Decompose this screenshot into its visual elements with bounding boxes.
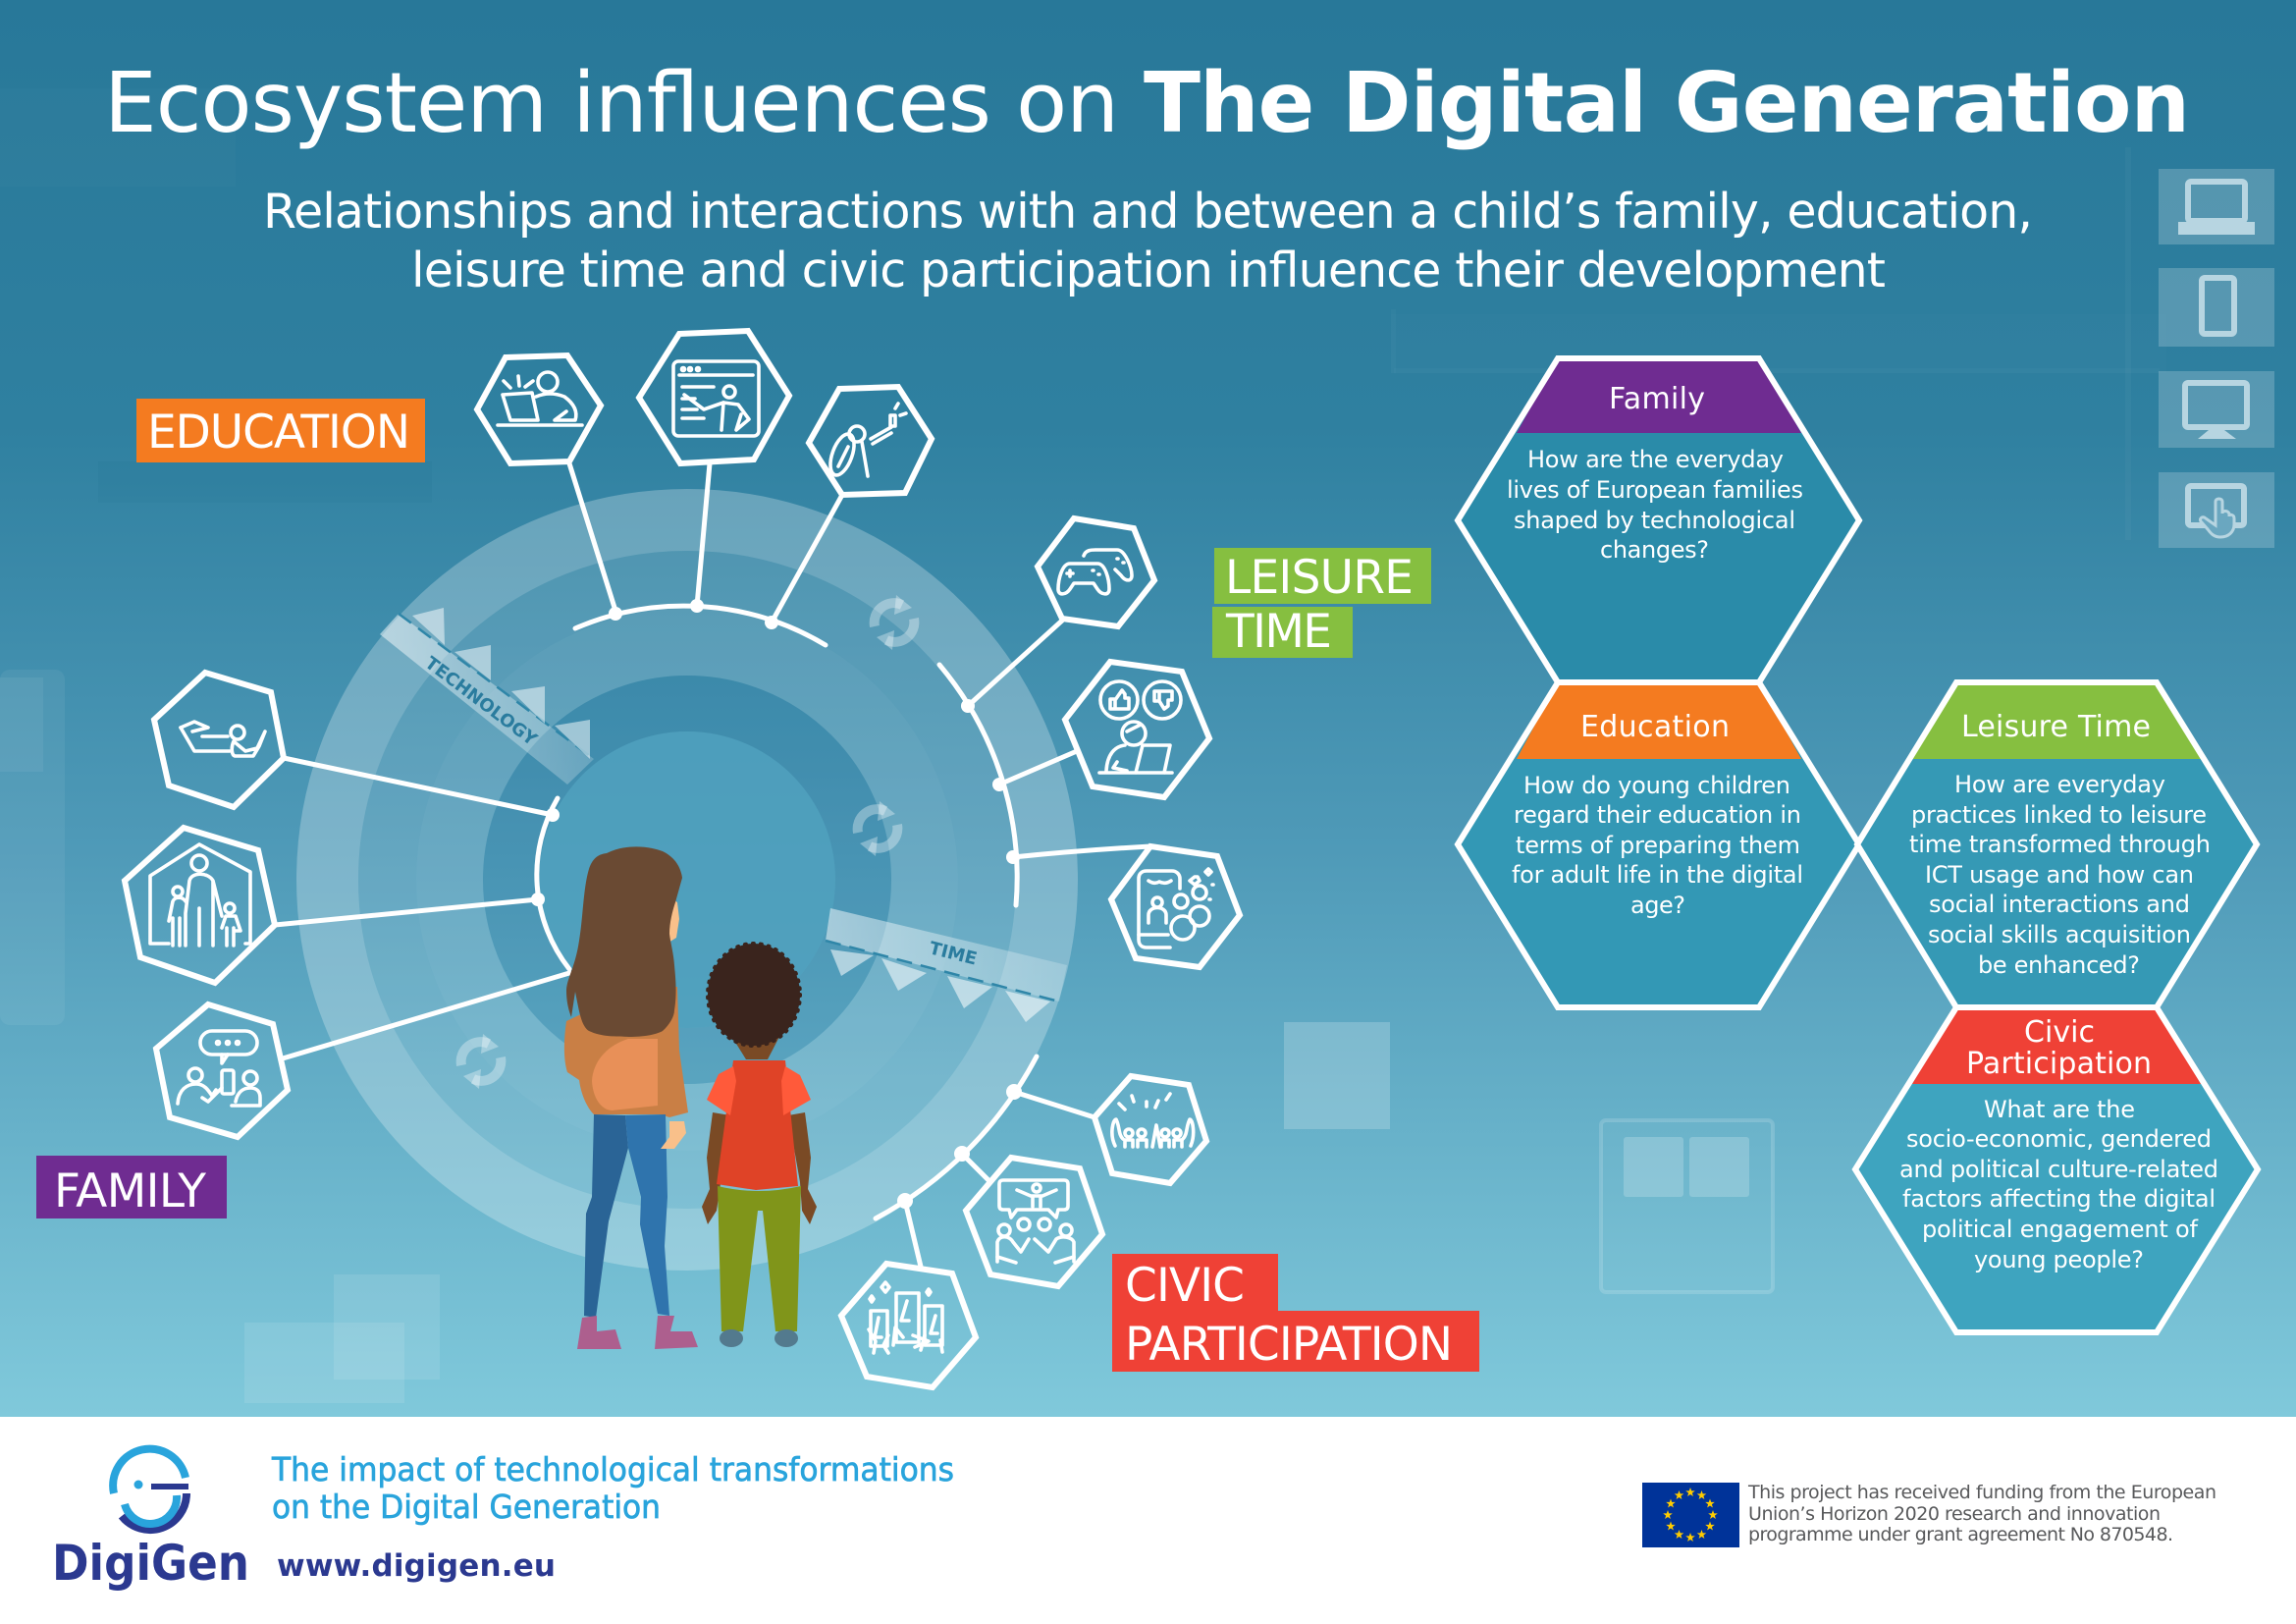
subtitle: Relationships and interactions with and between a child’s family, education, <box>263 184 2033 240</box>
subtitle: leisure time and civic participation influence their development <box>411 243 1886 298</box>
civic text: What are the <box>1984 1096 2135 1123</box>
logo wordmark: DigiGen <box>52 1535 249 1592</box>
civic heading: Participation <box>1966 1047 2152 1081</box>
label: civic participation: CIVIC <box>1125 1259 1245 1313</box>
family text: changes? <box>1600 536 1709 564</box>
time label: TIME <box>927 938 979 970</box>
civic heading <box>1966 1015 2152 1081</box>
icon: adult and child with phone <box>156 1004 288 1137</box>
education text <box>1512 772 1803 919</box>
time strip <box>826 908 1067 1022</box>
subtitle <box>263 184 2033 298</box>
panel: family question <box>1458 358 1859 682</box>
title: The Digital Generation <box>1144 55 2190 152</box>
boy figure <box>702 944 817 1347</box>
arms <box>702 1112 817 1224</box>
right boot <box>655 1316 698 1349</box>
funding statement: programme under grant agreement No 870548. <box>1748 1524 2173 1545</box>
t-shirt <box>717 1060 798 1190</box>
funding statement: This project has received funding from the European <box>1747 1482 2216 1503</box>
icon: monitor <box>2159 371 2274 448</box>
education text: terms of preparing them <box>1516 832 1800 859</box>
icon: raised phones <box>841 1264 976 1387</box>
panel: education question <box>1458 682 1859 1007</box>
education arc and connectors <box>569 463 842 645</box>
leisure text <box>1909 771 2211 979</box>
education header <box>1517 682 1801 759</box>
civic text: and political culture-related <box>1899 1156 2218 1183</box>
neck <box>728 1031 782 1059</box>
family arc and connectors <box>275 758 569 1058</box>
civic heading: Civic <box>2024 1015 2095 1050</box>
icon: student with laptop <box>477 355 601 463</box>
leisure text: be enhanced? <box>1978 951 2140 979</box>
project tagline <box>271 1450 954 1526</box>
icon: game controllers <box>1038 518 1154 626</box>
label: leisure time <box>1212 548 1431 659</box>
EU flag <box>1642 1483 1739 1547</box>
leisure header <box>1912 682 2201 759</box>
family heading: Family <box>1609 382 1705 416</box>
title <box>104 55 2190 152</box>
technology arrows <box>412 608 590 759</box>
civic text: political engagement of <box>1922 1216 2199 1243</box>
hand <box>661 1121 686 1149</box>
label: civic participation <box>1112 1254 1479 1372</box>
leisure text: How are everyday <box>1954 771 2165 798</box>
panel: civic participation question <box>1855 1007 2258 1332</box>
family text: shaped by technological <box>1514 507 1795 534</box>
project tagline: on the Digital Generation <box>272 1488 661 1526</box>
family text: How are the everyday <box>1527 446 1784 473</box>
leisure text: ICT usage and how can <box>1925 861 2194 889</box>
leisure arc and connectors <box>939 621 1150 905</box>
leisure text: social skills acquisition <box>1928 921 2191 948</box>
icon: family in a house <box>125 828 275 983</box>
girl figure <box>564 846 698 1349</box>
education text: for adult life in the digital <box>1512 861 1803 889</box>
icon: cycle arrows 3 <box>461 1034 501 1089</box>
icon: lying person with child <box>154 673 284 807</box>
icon: cheering crowd <box>1095 1076 1206 1183</box>
technology label: TECHNOLOGY <box>421 653 541 751</box>
icon: tablet with hand <box>2159 472 2274 548</box>
project tagline: The impact of technological transformations <box>271 1450 954 1489</box>
label: family: FAMILY <box>54 1164 206 1218</box>
right jeans leg <box>625 1114 669 1316</box>
hair <box>708 944 800 1046</box>
shoes <box>720 1329 798 1347</box>
civic text: socio-economic, gendered <box>1906 1125 2212 1153</box>
civic header <box>1912 1007 2201 1084</box>
leisure text: social interactions and <box>1929 891 2190 918</box>
hoodie highlight <box>592 1039 658 1110</box>
civic text <box>1899 1096 2218 1273</box>
civic arc and connectors <box>876 1056 1095 1267</box>
leisure heading: Leisure Time <box>1961 710 2151 744</box>
education text: regard their education in <box>1514 801 1801 829</box>
left jeans leg <box>584 1114 628 1318</box>
label: leisure time: TIME <box>1225 605 1332 659</box>
icon: cycle arrows 1 <box>875 595 914 650</box>
education heading: Education <box>1580 710 1730 744</box>
footer <box>0 1417 2296 1624</box>
icon: laptop <box>2159 169 2274 244</box>
hoodie <box>564 987 688 1117</box>
funding statement: Union’s Horizon 2020 research and innovation <box>1748 1503 2161 1525</box>
family header <box>1517 358 1801 433</box>
icon: group watching speech bubble <box>966 1158 1102 1286</box>
icon: phone with social reactions <box>1111 846 1240 967</box>
icon: phone <box>2159 268 2274 347</box>
time arrows <box>830 949 1050 1022</box>
icon: selfie with backpack <box>809 387 932 495</box>
sleeves <box>707 1066 811 1115</box>
device icons panel <box>2159 169 2274 548</box>
trousers <box>718 1186 801 1331</box>
label: civic participation: PARTICIPATION <box>1125 1318 1453 1372</box>
panel: leisure time question <box>1857 682 2257 1007</box>
website: www.digigen.eu <box>277 1548 556 1584</box>
family text <box>1507 446 1803 564</box>
left boot <box>577 1316 621 1349</box>
education text: age? <box>1630 892 1685 919</box>
background decoration <box>0 88 2166 1403</box>
leisure text: practices linked to leisure <box>1911 801 2207 829</box>
concentric ecosystem rings <box>328 520 1046 1239</box>
education text: How do young children <box>1523 772 1790 799</box>
funding statement <box>1747 1482 2216 1545</box>
civic text: young people? <box>1974 1246 2144 1273</box>
leisure text: time transformed through <box>1909 831 2211 858</box>
label: education: EDUCATION <box>147 406 410 460</box>
icon: online teacher <box>639 331 789 463</box>
logo: DigiGen mark <box>113 1449 188 1530</box>
civic text: factors affecting the digital <box>1902 1185 2216 1213</box>
label: leisure time: LEISURE <box>1225 551 1414 605</box>
technology strip <box>380 608 594 785</box>
hair <box>566 846 682 1037</box>
icon: cycle arrows 2 <box>858 801 897 856</box>
title: Ecosystem influences on <box>104 55 1119 152</box>
icon: likes and dislikes <box>1065 662 1209 797</box>
label: family <box>36 1156 227 1218</box>
family text: lives of European families <box>1507 476 1803 504</box>
face <box>668 898 679 943</box>
